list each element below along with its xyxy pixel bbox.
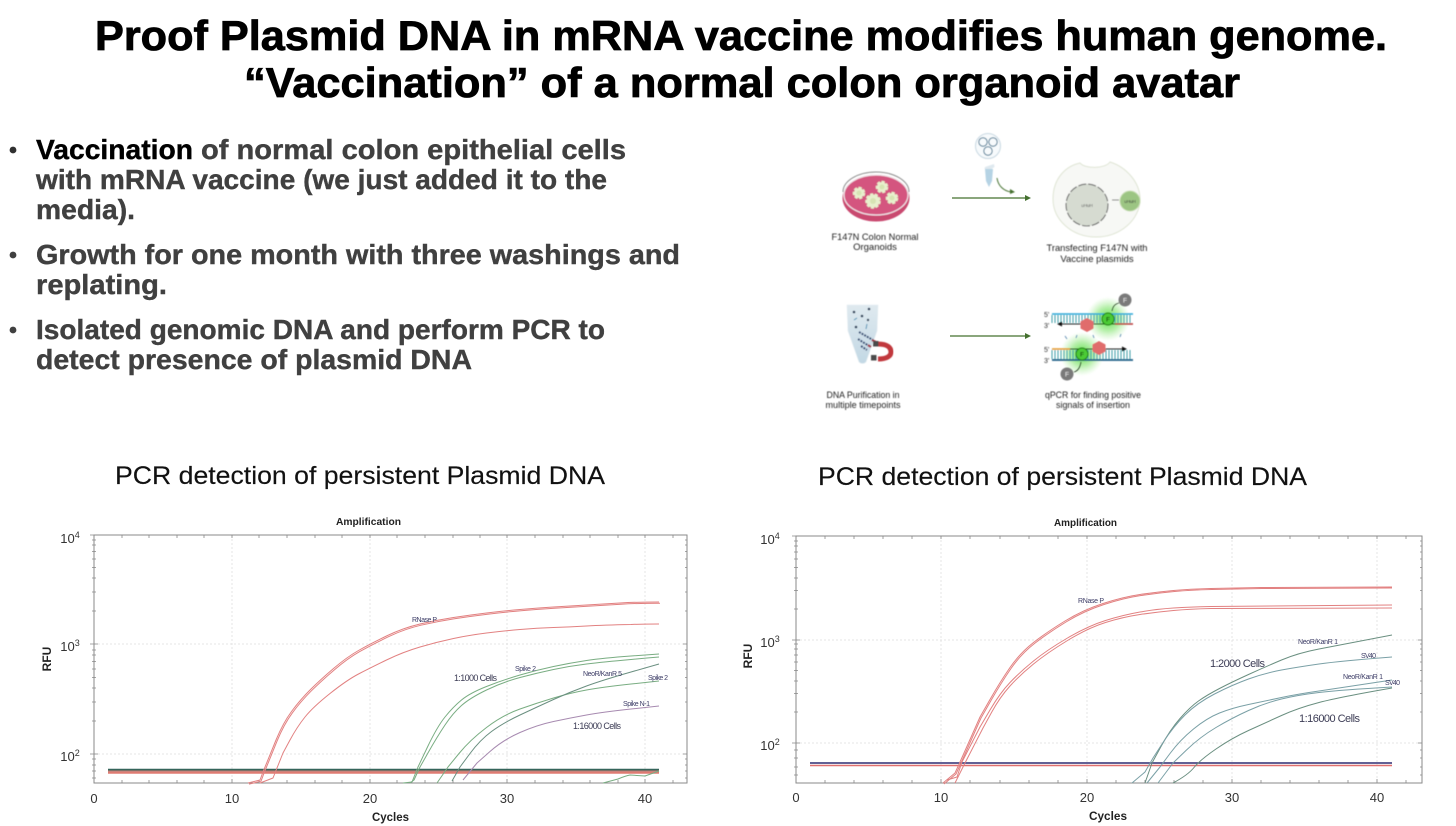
label: qPCR: signals of insertion — [1056, 400, 1130, 411]
heading: left chart: PCR detection of persistent Plasmid DNA — [115, 462, 605, 490]
curves: RNase P — [943, 587, 1392, 784]
x axis labels: 10 — [934, 790, 948, 805]
x axis labels — [90, 791, 652, 806]
bullet 3: PCR — [10, 314, 605, 375]
y axis labels — [60, 530, 80, 764]
curve annotations: RNase P — [412, 617, 437, 624]
icon: qPCR probes on DNA strands: 3' — [1044, 358, 1049, 365]
x axis labels: 10 — [225, 791, 239, 806]
x axis labels: 30 — [1225, 790, 1239, 805]
icon: qPCR probes on DNA strands: F — [1080, 352, 1084, 358]
y axis labels: 4 — [775, 531, 780, 541]
y axis labels — [760, 531, 780, 753]
bullet 2: growth: replating. — [36, 269, 167, 300]
chart: right amplification plot — [741, 518, 1422, 823]
x axis title: Cycles — [1089, 809, 1127, 823]
label: transfection: Transfecting F147N with — [1046, 243, 1148, 254]
icon: qPCR probes on DNA strands — [1044, 294, 1133, 380]
curve annotations — [1078, 598, 1400, 725]
icon: transfected cell: uHuH — [1081, 203, 1093, 208]
label: DNA purification: multiple timepoints — [826, 400, 901, 411]
icon: qPCR probes on DNA strands: F — [1065, 372, 1069, 378]
curves: RNase P — [248, 602, 660, 784]
baseline threshold lines — [810, 763, 1392, 766]
icon: qPCR probes on DNA strands: F — [1123, 298, 1127, 304]
bullet 1: vaccination: Vaccination — [36, 134, 193, 165]
x axis labels: 20 — [363, 791, 377, 806]
heading: right chart: PCR detection of persistent Plasmid DNA — [818, 463, 1307, 491]
x axis labels: 0 — [90, 791, 98, 806]
curve annotations: SV40 — [1361, 653, 1376, 660]
y axis labels: 10 — [760, 635, 775, 650]
arrow: organoids to transfection — [952, 195, 1031, 201]
icon: qPCR probes on DNA strands: 5' — [1044, 347, 1049, 354]
x axis labels — [792, 790, 1384, 805]
bullet 1: vaccination: media). — [36, 194, 135, 225]
x axis labels: 40 — [1370, 790, 1384, 805]
y axis labels: 10 — [760, 532, 775, 547]
y axis labels: 10 — [60, 639, 75, 654]
icon: qPCR probes on DNA strands: 3' — [1044, 323, 1049, 330]
icon: transfected cell — [1053, 162, 1140, 237]
chart title: Amplification — [1054, 518, 1117, 529]
y axis labels: 2 — [775, 737, 780, 747]
label: qPCR — [1045, 390, 1141, 411]
label: organoids: F147N Colon Normal — [832, 232, 918, 243]
label: transfection — [1046, 243, 1148, 265]
x axis labels: 40 — [638, 791, 652, 806]
y axis labels: 4 — [75, 530, 80, 540]
y axis labels: 3 — [775, 634, 780, 644]
title — [95, 12, 1387, 106]
title: “Vaccination” of a normal colon organoid avatar — [244, 59, 1240, 106]
curves: NeoR/KanR and SV40 targets — [1132, 635, 1392, 783]
curve annotations: 1:16000 Cells — [1299, 713, 1360, 725]
label: DNA purification: DNA Purification in — [826, 390, 900, 401]
icon: plasmid vial — [976, 134, 1015, 194]
y axis labels: 10 — [60, 531, 75, 546]
label: organoids: Organoids — [853, 242, 897, 253]
bullet 1: vaccination — [10, 134, 626, 225]
chart title: Amplification — [336, 517, 401, 528]
icon: organoid petri dish — [842, 172, 910, 222]
label: organoids — [832, 232, 918, 253]
y axis title: RFU — [741, 644, 755, 668]
x axis title: Cycles — [372, 810, 409, 824]
workflow schematic — [826, 134, 1148, 411]
bullet 1: vaccination: with mRNA vaccine (we just added it to the — [35, 164, 607, 195]
label: transfection: Vaccine plasmids — [1060, 254, 1134, 265]
icon: qPCR probes on DNA strands: 5' — [1044, 312, 1049, 319]
curve annotations: Spike 2 — [648, 675, 668, 682]
curve annotations: Spike 2 — [515, 666, 536, 673]
bullet 2: growth — [10, 239, 680, 300]
y axis labels: 3 — [75, 638, 80, 648]
chart: left amplification plot — [40, 517, 687, 824]
bullet list: experimental steps — [10, 134, 680, 375]
label: DNA purification — [826, 390, 901, 411]
icon: qPCR probes on DNA strands: F — [1106, 316, 1110, 324]
baseline threshold lines — [108, 770, 659, 772]
y axis title: RFU — [40, 647, 54, 671]
x axis labels: 30 — [500, 791, 514, 806]
curve annotations: 1:1000 Cells — [454, 673, 498, 683]
curve annotations: Spike N-1 — [623, 701, 650, 708]
curve annotations: NeoR/KanR 5 — [583, 671, 622, 678]
curve annotations: NeoR/KanR 1 — [1298, 639, 1338, 646]
curve annotations — [412, 617, 668, 731]
curve annotations: 1:2000 Cells — [1210, 658, 1266, 670]
bullet 3: PCR: Isolated genomic DNA and perform PCR to — [36, 314, 605, 345]
curve annotations: SV40 — [1385, 680, 1400, 687]
y axis labels: 10 — [60, 749, 75, 764]
curve annotations: NeoR/KanR 1 — [1343, 674, 1383, 681]
bullet 1: vaccination: of normal colon epithelial cells — [201, 134, 626, 165]
x axis labels: 0 — [792, 790, 800, 805]
icon: transfected cell: uHuH — [1124, 199, 1136, 204]
curve annotations: 1:16000 Cells — [573, 721, 622, 731]
y axis labels: 2 — [75, 748, 80, 758]
bullet 2: growth: Growth for one month with three washings and — [36, 239, 680, 270]
bullet 3: PCR: detect presence of plasmid DNA — [36, 344, 472, 375]
y axis labels: 10 — [760, 738, 775, 753]
x axis labels: 20 — [1080, 790, 1094, 805]
curves: Spike and NeoR/KanR targets — [403, 654, 659, 783]
title: Proof Plasmid DNA in mRNA vaccine modifies human genome. — [95, 12, 1387, 59]
arrow: purification to qPCR — [950, 333, 1031, 339]
label: qPCR: qPCR for finding positive — [1045, 390, 1141, 401]
curve annotations: RNase P — [1078, 598, 1104, 605]
icon: DNA purification tube and magnet — [847, 305, 891, 364]
